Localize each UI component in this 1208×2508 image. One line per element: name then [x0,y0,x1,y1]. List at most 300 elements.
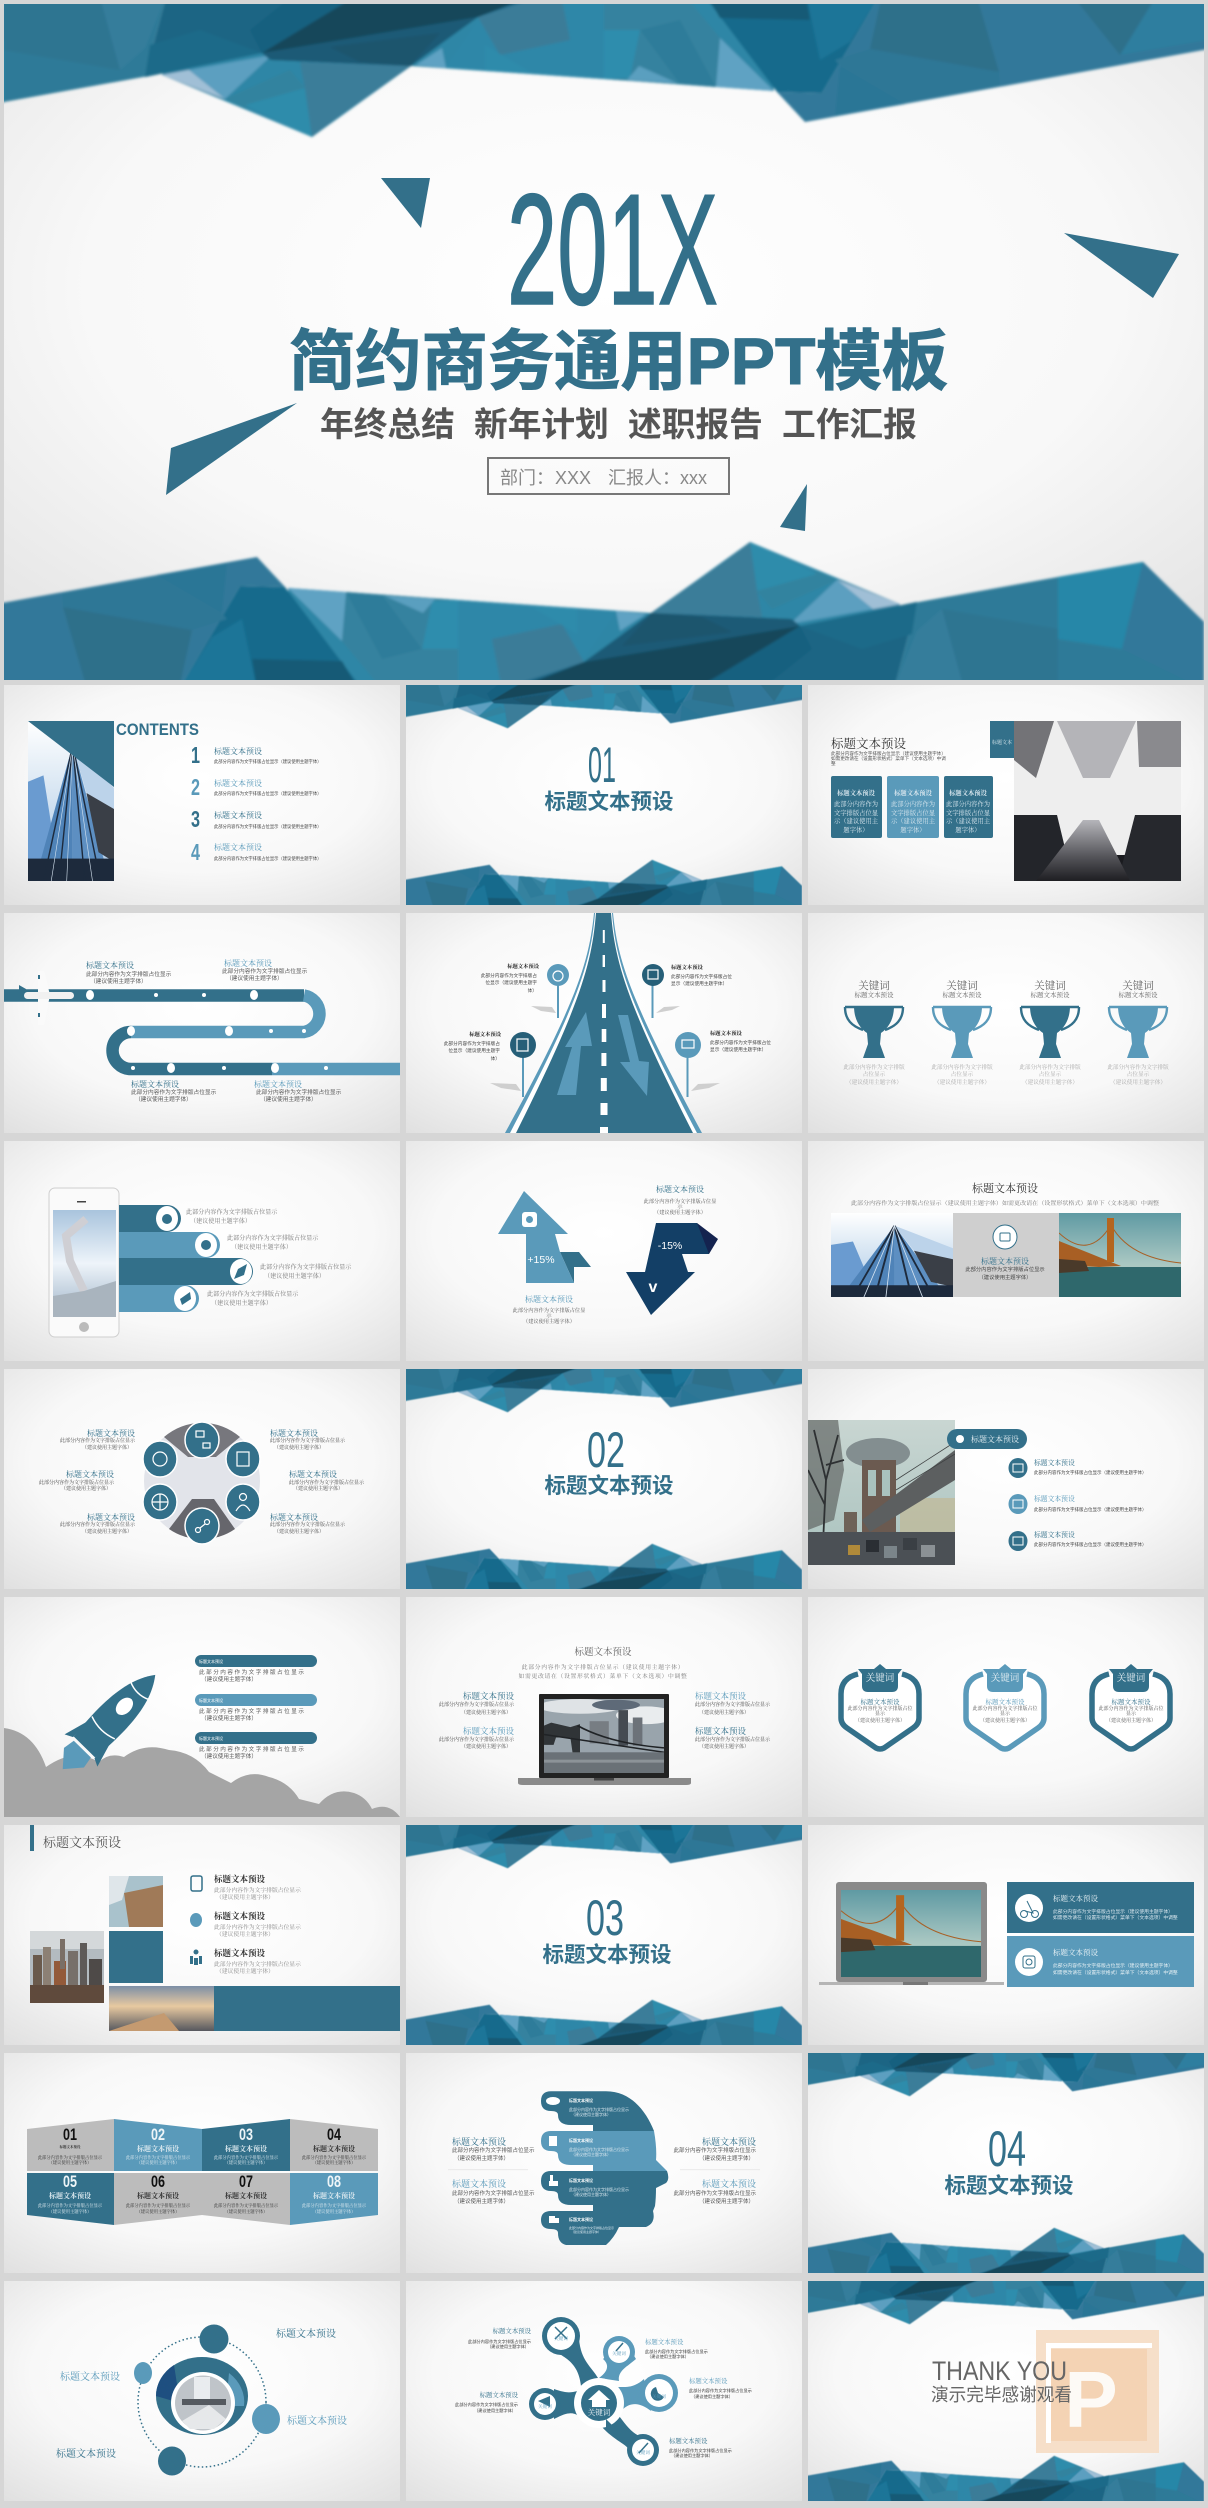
panel: folded grid [4,2053,400,2273]
list text: 此部分内容作为文字排版占位显示 [214,1923,301,1931]
section number: 04 [988,2121,1026,2177]
rocket [46,1659,172,1785]
head segments [541,2091,668,2245]
panel: photo strip [808,1141,1204,1361]
list text: 此部分内容作为文字排版占位显示 [214,1960,301,1968]
three text cards: 题字体） [900,825,926,834]
arrow labels: 示 [546,1312,552,1319]
panel text: 此部分内容作为文字排版占位显示 [126,2202,191,2209]
right labels: 标题文本预设 [702,2178,756,2189]
laptop [518,1694,691,1785]
trophy labels: 关键词 [858,979,890,992]
node centres [534,2322,673,2461]
cover subtitle: 述职报告 [628,406,763,444]
node icons and keywords [538,2327,666,2456]
list text: 此部分内容作为文字排版占位显示（建议使用主题字体） [1034,1469,1146,1476]
right labels [645,2337,752,2459]
left labels: （建议使用主题字体） [61,1485,111,1492]
panel text: 此部分内容作为文字排版占位显示 [302,2154,367,2161]
right labels: （建议使用主题字体） [699,1709,749,1716]
right labels: 此部分内容作为文字排版占位显示 [673,2189,756,2197]
left labels: 标题文本预设 [87,1428,135,1438]
list text: 标题文本预设 [1034,1458,1075,1467]
three text cards: 示（建议使用主 [891,816,936,825]
trophy labels: （建议使用主题字体） [846,1078,902,1086]
left labels: 标题文本预设 [480,2390,519,2399]
right labels: 标题文本预设 [702,2136,756,2147]
shield text: 标题文本预设 [1112,1697,1151,1706]
panel text: （建议使用主题字体） [225,2208,267,2215]
panel numbers: 01 [63,2125,77,2144]
list text: 此部分内容作为文字排版占位显示（建议使用主题字体） [1034,1506,1146,1513]
right labels [673,2136,760,2205]
list text: 此部分内容作为文字排版占位显示 [214,1886,301,1894]
panel text: （建议使用主题字体） [49,2159,91,2166]
right labels: 此部分内容作为文字排版占位显示 [673,2146,756,2154]
right labels: 标题文本预设 [645,2337,684,2346]
arrow labels [513,1184,716,1325]
section title: 标题文本预设 [544,789,674,814]
arrow labels: 此部分内容作为文字排版占位显 [513,1306,585,1314]
right labels: 此部分内容作为文字排版占位显示 [289,1479,365,1486]
timeline labels: 此部分内容作为文字排版占位显示 [256,1088,342,1096]
heading: 标题文本预设 [972,1181,1038,1195]
up arrow [498,1191,591,1283]
right labels [695,1691,771,1750]
presenter box: XXX [555,468,591,488]
right labels: 标题文本预设 [669,2436,708,2445]
pill captions [199,1668,305,1760]
right labels: （建议使用主题字体） [274,1444,324,1451]
left labels: 标题文本预设 [87,1512,135,1522]
centre photo disc [144,1423,260,1539]
right labels: 标题文本预设 [270,1512,318,1522]
polygon banners top and bottom [0,0,1208,689]
trophy labels: 此部分内容作为文字排版 [931,1063,993,1071]
node icons and keywords: 关键词 [652,2393,666,2400]
node icons and keywords: 关键词 [554,2335,568,2342]
arrow labels: （建议使用主题字体） [654,1208,706,1216]
bar captions: （建议使用主题字体） [231,1243,292,1251]
panel text: （建议使用主题字体） [313,2208,355,2215]
three text cards: 此部分内容作为 [946,799,990,808]
heading: 标题文本预设 [574,1646,632,1658]
road labels [444,962,771,1062]
intro text: 如需更改请在（设置形状格式）菜单下（文本选项）中调 [831,755,946,762]
left labels: 标题文本预设 [452,2178,506,2189]
map arms [529,2317,678,2466]
intro text [831,750,946,766]
timeline labels: （建议使用主题字体） [260,1095,317,1103]
light card: 如需更改请在（设置形状格式）菜单下（文本选项）中调整 [1053,1969,1178,1976]
timeline labels: （建议使用主题字体） [226,974,283,982]
heading: 如需更改请在（设置形状格式）菜单下（文本选项）中调整 [519,1672,687,1680]
contents list: 1 [191,742,200,768]
pill captions: （建议使用主题字体） [201,1675,257,1683]
folded panels [27,2119,378,2225]
road labels: 标题文本预设 [710,1029,742,1037]
title tag: 标题文本 [992,739,1012,746]
left labels [448,2136,535,2205]
panel numbers: 03 [239,2125,253,2144]
bridge photo [808,1420,955,1565]
list text: （建议使用主题字体） [216,1930,274,1938]
node glyphs [152,1431,250,1532]
node icons and keywords: 关键词 [538,2403,552,2410]
segment text: 标题文本预设 [569,2216,593,2222]
left labels: 此部分内容作为文字排版占位显示 [439,1736,515,1743]
panel text: 此部分内容作为文字排版占位显示 [214,2154,279,2161]
contents list: 标题文本预设 [214,778,262,788]
right labels: （建议使用主题字体） [274,1528,324,1535]
left labels: 此部分内容作为文字排版占位显示 [452,2189,535,2197]
arrow labels: 标题文本预设 [525,1294,573,1304]
panel text: 此部分内容作为文字排版占位显示 [126,2154,191,2161]
right labels: 此部分内容作为文字排版占位显示 [270,1521,346,1528]
left labels: （建议使用主题字体） [487,2343,529,2350]
section number: 03 [586,1890,624,1946]
panel numbers: 06 [151,2172,165,2191]
timeline labels: 标题文本预设 [131,1079,179,1089]
panel text: （建议使用主题字体） [137,2208,179,2215]
year number: 201X [507,162,718,338]
panel text: 标题文本预设 [49,2191,91,2200]
road labels: 体） [491,1055,500,1062]
three text cards: 示（建议使用主 [834,816,879,825]
dark card: 此部分内容作为文字排版占位显示（建议使用主题字体） [1053,1908,1173,1915]
orbit labels: 标题文本预设 [60,2370,120,2383]
panel: circular icons [4,1369,400,1589]
shield text: （建议使用主题字体） [980,1717,1030,1724]
bar captions: 此部分内容作为文字排版占位显示 [260,1263,352,1271]
road labels: 此部分内容作为文字排版占 [444,1040,500,1047]
shield text: 此部分内容作为文字排版占位 [972,1705,1038,1712]
trophy labels: （建议使用主题字体） [934,1078,990,1086]
shield text: 显示 [1000,1710,1011,1717]
right labels: 此部分内容作为文字排版占位显示 [645,2348,708,2355]
intro text: 整 [831,760,836,766]
right labels: 此部分内容作为文字排版占位显示 [695,1701,771,1708]
node icons and keywords: 关键词 [612,2350,626,2357]
segment text: 标题文本预设 [569,2177,593,2183]
trophy labels: 标题文本预设 [1118,990,1158,999]
panel: three shields [808,1597,1204,1817]
right labels: （建议使用主题字体） [293,1485,343,1492]
list icons [1008,1458,1028,1551]
title pills: 标题文本预设 [199,1658,223,1664]
panel text: （建议使用主题字体） [225,2159,267,2166]
list text: 标题文本预设 [214,1911,266,1921]
intro text: 此部分内容作为文字排版占位显示（建议使用主题字体） [831,750,946,757]
left labels: （建议使用主题字体） [454,2197,509,2205]
panel text: （建议使用主题字体） [313,2159,355,2166]
accent bar and heading: 标题文本预设 [43,1835,121,1850]
presenter box [488,458,729,494]
left labels: 标题文本预设 [452,2136,506,2147]
centre hub [574,2378,624,2431]
panel text: 标题文本预设 [225,2191,267,2200]
heading: 此部分内容作为文字排版占位显示（建议使用主题字体） [522,1663,684,1671]
polygon banners [755,2276,1208,2504]
contents list: 此部分内容作为文字排版占位显示（建议使用主题字体） [214,855,321,862]
down arrow: -15% [658,1240,682,1252]
light card: 此部分内容作为文字排版占位显示（建议使用主题字体） [1053,1962,1173,1969]
right labels: 标题文本预设 [289,1469,337,1479]
bar captions [186,1208,352,1307]
left labels [439,1691,515,1750]
trophy labels: 占位显示 [1039,1070,1062,1078]
phone [49,1188,119,1337]
segment text [569,2097,629,2234]
contents list: 4 [191,839,200,865]
timeline labels: 标题文本预设 [86,960,134,970]
shield text: 标题文本预设 [986,1697,1025,1706]
panel: text and skyscraper [808,685,1204,905]
grey card: 此部分内容作为文字排版占位显示 [965,1265,1045,1273]
panel: section 02 [353,1364,807,1592]
panel: thank you [755,2276,1208,2504]
panel numbers [63,2125,341,2191]
contents list [191,742,321,865]
right labels: （建议使用主题字体） [699,2154,754,2162]
segment text: （建议使用主题字体） [571,2151,611,2157]
section title: 标题文本预设 [542,1942,672,1967]
left labels: 标题文本预设 [66,1469,114,1479]
cover subtitle: 工作汇报 [782,406,917,444]
contents list: 3 [191,806,200,832]
shield text: 关键词 [991,1672,1020,1684]
list text: 此部分内容作为文字排版占位显示（建议使用主题字体） [1034,1541,1146,1548]
dotted orbit [138,2337,266,2467]
plane [19,971,74,1025]
presenter box: 部门： [500,468,554,488]
left labels: 标题文本预设 [463,1691,514,1701]
pill captions: （建议使用主题字体） [201,1714,257,1722]
segment text: （建议使用主题字体） [571,2111,611,2117]
node icons and keywords: 关键词 [636,2449,650,2456]
left labels: （建议使用主题字体） [461,1709,511,1716]
right labels: 此部分内容作为文字排版占位显示 [669,2447,732,2454]
centre hub: 关键词 [588,2407,611,2417]
left labels: 此部分内容作为文字排版占位显示 [39,1479,115,1486]
presenter box: 汇报人： [608,468,680,488]
left labels: 此部分内容作为文字排版占位显示 [452,2146,535,2154]
panel text: 此部分内容作为文字排版占位显示 [302,2202,367,2209]
segment text: 标题文本预设 [569,2137,593,2143]
right labels: （建议使用主题字体） [699,1743,749,1750]
three text cards [831,776,993,838]
bar captions: （建议使用主题字体） [211,1299,272,1307]
panel numbers: 02 [151,2125,165,2144]
three text cards: 文字排版占位显 [891,808,936,817]
trophy labels: 标题文本预设 [854,990,894,999]
three text cards: 此部分内容作为 [834,799,878,808]
segment text: 此部分内容作为文字排版占位显示 [569,2106,629,2112]
contents list: 标题文本预设 [214,842,262,852]
trophy labels: 标题文本预设 [942,990,982,999]
shield text: 关键词 [1117,1672,1146,1684]
segment text: 此部分内容作为文字排版占位显示 [569,2146,629,2152]
panel numbers: 08 [327,2172,341,2191]
panel text: 标题文本预设 [313,2144,355,2153]
trophy labels: 此部分内容作为文字排版 [843,1063,905,1071]
contents list: 此部分内容作为文字排版占位显示（建议使用主题字体） [214,823,321,830]
right labels: 此部分内容作为文字排版占位显示 [689,2387,752,2394]
decorative triangles [166,178,1179,531]
sunset photo [109,1986,214,2031]
watermark stamp: P [1064,2355,1118,2444]
list text [1034,1458,1146,1548]
left labels: 标题文本预设 [463,1726,514,1736]
road labels: 此部分内容作为文字排版占位 [671,973,732,980]
timeline labels: 标题文本预设 [224,958,272,968]
three text cards: 此部分内容作为 [891,799,935,808]
tower photo [109,1876,163,1927]
left labels: 此部分内容作为文字排版占位显示 [60,1437,136,1444]
description: 此部分内容作为文字排版占位显示（建议使用主题字体）如需更改请在（设置形状格式）菜单下（文本选项）中调整 [851,1199,1160,1207]
accent bar and heading [30,1825,121,1851]
teal band [214,1986,400,2031]
list text: 标题文本预设 [214,1874,266,1884]
left labels: 标题文本预设 [493,2326,532,2335]
panel: laptop centre [406,1597,802,1817]
section title: 标题文本预设 [544,1473,674,1498]
panel: section 01 [353,680,807,908]
trophy labels: 关键词 [1122,979,1154,992]
left labels: （建议使用主题字体） [461,1743,511,1750]
panel: rocket [4,1597,400,1817]
timeline labels: 标题文本预设 [254,1079,302,1089]
grey card [953,1213,1059,1297]
panel: phone bars [4,1141,400,1361]
panel text: 此部分内容作为文字排版占位显示 [214,2202,279,2209]
panel numbers: 04 [327,2125,341,2144]
watermark stamp [1036,2330,1159,2453]
timeline labels [86,958,342,1103]
polygon banners [353,1820,807,2048]
three text cards: 文字排版占位显 [946,808,991,817]
timeline labels: （建议使用主题字体） [135,1095,192,1103]
arrow labels: （建议使用主题字体） [523,1317,575,1325]
trophy labels: 此部分内容作为文字排版 [1107,1063,1169,1071]
heading [519,1646,687,1680]
shield text: （建议使用主题字体） [1106,1717,1156,1724]
title pills: 标题文本预设 [199,1697,223,1703]
arrow labels: 此部分内容作为文字排版占位显 [644,1197,716,1205]
road labels: 显示（建议使用主题字体） [710,1046,766,1053]
polygon banners [353,1364,807,1592]
road labels: 体） [528,987,537,994]
trophy labels [843,979,1169,1086]
contents list: 标题文本预设 [214,810,262,820]
dark card [1007,1882,1194,1933]
panel numbers: 05 [63,2172,77,2191]
right labels: 标题文本预设 [270,1428,318,1438]
road labels: 此部分内容作为文字排版占 [481,972,537,979]
arrow labels: 标题文本预设 [656,1184,704,1194]
teal square [109,1931,163,1983]
trophy icons [845,1006,1167,1058]
right labels: 标题文本预设 [689,2376,728,2385]
bar captions: 此部分内容作为文字排版占位显示 [227,1234,319,1242]
panel text: （建议使用主题字体） [49,2208,91,2215]
right labels: 此部分内容作为文字排版占位显示 [270,1437,346,1444]
road labels: 位显示（建议使用主题字 [485,979,537,986]
trophy labels: （建议使用主题字体） [1022,1078,1078,1086]
panel: mind map [406,2281,802,2501]
list text: 标题文本预设 [1034,1494,1075,1503]
trophy labels: 此部分内容作为文字排版 [1019,1063,1081,1071]
left labels: 此部分内容作为文字排版占位显示 [468,2338,531,2345]
panel text: 标题文本预设 [225,2144,267,2153]
panel: bridge and list [808,1369,1204,1589]
trophy labels: 占位显示 [951,1070,974,1078]
segment text: （建议使用主题字体） [571,2191,611,2197]
orbit labels: 标题文本预设 [56,2447,116,2460]
icon nodes [143,1422,260,1544]
title pill: 标题文本预设 [971,1434,1019,1444]
right labels: 标题文本预设 [695,1691,747,1701]
road [505,913,702,1133]
contents list: 2 [191,774,200,800]
left labels: 此部分内容作为文字排版占位显示 [455,2401,518,2408]
panel text: 标题文本预设 [137,2191,179,2200]
panel numbers: 07 [239,2172,253,2191]
right labels [270,1428,365,1535]
panel: head profile [406,2053,802,2273]
trophy labels: 关键词 [946,979,978,992]
trophy labels: 占位显示 [1127,1070,1150,1078]
shield text: 关键词 [866,1672,895,1684]
right labels: 此部分内容作为文字排版占位显示 [695,1736,771,1743]
panel: trophies [808,913,1204,1133]
stacked bars [119,1205,253,1312]
cover subtitle: 新年计划 [474,406,609,444]
orbit labels: 标题文本预设 [276,2327,336,2340]
road labels: 标题文本预设 [671,963,703,971]
right labels: （建议使用主题字体） [691,2393,733,2400]
pill captions: 此部分内容作为文字排版占位显示 [199,1707,305,1715]
shield text: 显示 [875,1710,886,1717]
panel text: 标题文本预设 [313,2191,355,2200]
timeline labels: 此部分内容作为文字排版占位显示 [86,970,172,978]
grey card: （建议使用主题字体） [979,1273,1031,1281]
panel: photo mosaic [4,1825,400,2045]
segment text: 此部分内容作为文字排版占位显示 [569,2186,629,2192]
panel text: （建议使用主题字体） [137,2159,179,2166]
section number: 01 [588,737,616,793]
three text cards: 题字体） [955,825,981,834]
list text: 标题文本预设 [214,1948,266,1958]
bar captions: （建议使用主题字体） [190,1217,251,1225]
panel: orbit diagram [4,2281,400,2501]
up arrow: +15% [527,1254,555,1266]
bridge photo [1059,1213,1181,1297]
panel: cover slide [0,0,1208,689]
list icons [190,1876,202,1965]
right labels: （建议使用主题字体） [647,2353,689,2360]
timeline labels: 此部分内容作为文字排版占位显示 [131,1088,217,1096]
shield text: （建议使用主题字体） [855,1717,905,1724]
sign posts [490,964,720,1097]
panel: plane timeline [4,913,400,1133]
segment text: 此部分内容作为文字排版占位显示 [569,2225,614,2230]
down arrow [626,1223,718,1315]
road labels: 此部分内容作为文字排版占位 [710,1039,771,1046]
list text [214,1874,301,1975]
light card [1007,1936,1194,1987]
title tag [990,721,1014,758]
